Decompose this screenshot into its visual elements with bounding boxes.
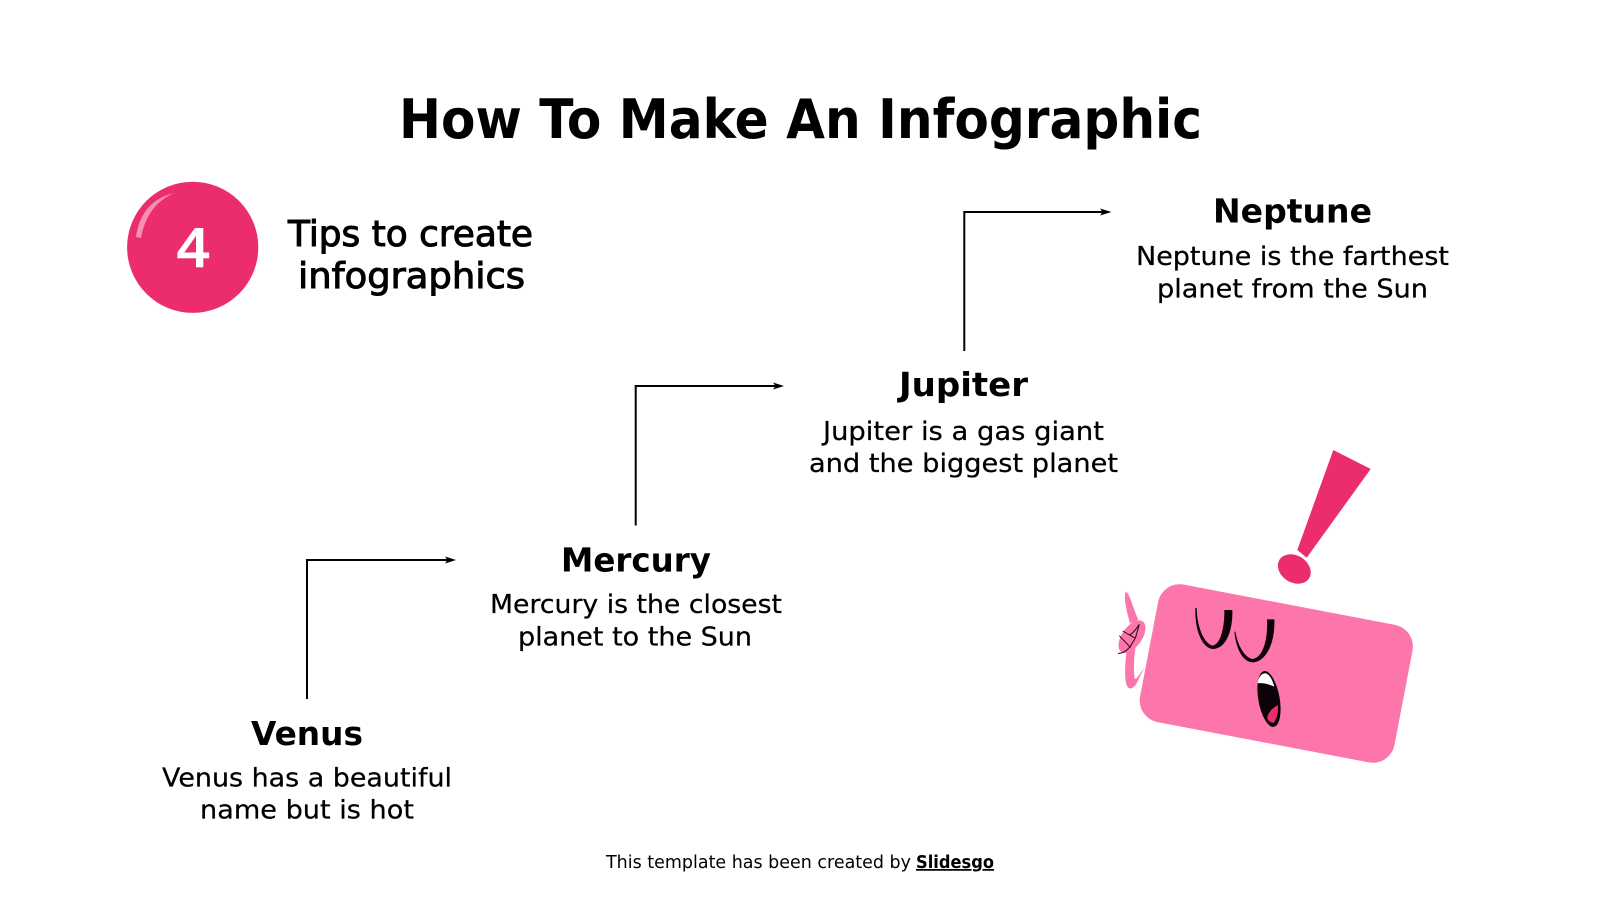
text block: Neptune: Neptune is the farthest [1136,242,1449,272]
text block: Neptune [1136,192,1449,304]
text block: Mercury: Mercury is the closest [490,590,782,620]
footer credit: Slidesgo [916,853,994,873]
face [1195,608,1284,729]
badge: number 4 [127,182,258,313]
exclamation mark [1272,450,1371,590]
subtitle: tips [287,214,533,297]
badge: number 4: 4 [176,220,212,280]
text block: Venus: name but is hot [200,796,414,826]
text block: Jupiter: and the biggest planet [809,449,1118,479]
arrow: Jupiter to Neptune [964,208,1112,351]
text block: Venus: Venus has a beautiful [162,764,452,794]
title: How To Make An Infographic [399,88,1202,151]
text block: Jupiter [809,365,1118,479]
text block: Mercury [490,540,782,652]
text block: Mercury: Mercury [561,540,711,580]
text block: Venus [162,714,452,826]
text block: Jupiter: Jupiter [897,365,1029,404]
text block: Venus: Venus [251,714,363,753]
text block: Neptune: Neptune [1213,192,1372,230]
text block: Jupiter: Jupiter is a gas giant [821,417,1104,447]
footer credit: This template has been created by [605,853,911,873]
subtitle: tips: infographics [298,256,525,297]
hand [1113,592,1151,688]
subtitle: tips: Tips to create [287,214,533,255]
arrow: Mercury to Jupiter [636,382,784,526]
text block: Mercury: planet to the Sun [518,622,752,652]
arrow: Venus to Mercury [307,556,456,699]
character: pink rectangle with exclamation mark [1113,450,1417,767]
body [1136,580,1417,767]
text block: Neptune: planet from the Sun [1157,274,1428,304]
